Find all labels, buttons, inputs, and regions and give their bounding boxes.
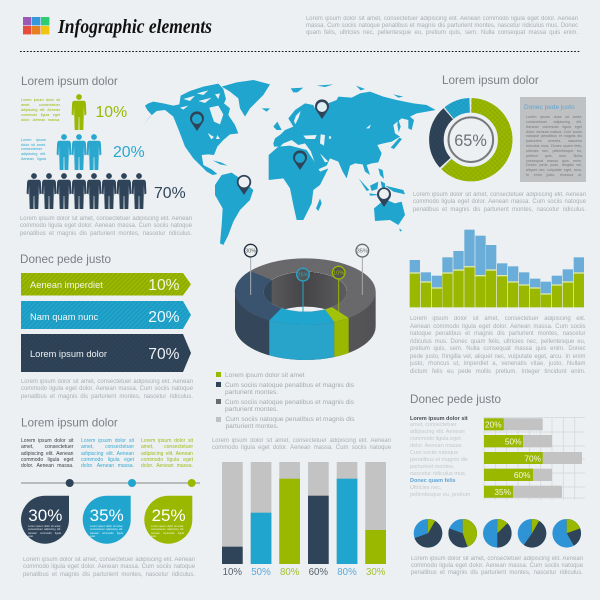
header [23,16,578,38]
text block: timeline caption: penatibus et magnis dis parturient montes, nascetur ridiculus. [23,572,195,578]
callout box: ultricies nec, pellentesque eu, [526,149,582,153]
text block: column chart caption: pede justo, fringilla vel, aliquet nec, vulputate eget, arcu. In enim [410,354,586,360]
heading: Lorem ipsum dolor [21,75,118,88]
text block: list: Lorem ipsum dolor sit [410,416,468,422]
stacked columns [410,230,584,307]
text block: column chart caption [410,316,586,378]
text block: green note: Lorem ipsum dolor sit [21,98,60,102]
text block: blue note [21,138,46,163]
bar: 20%: 20% [485,420,502,430]
bar: 50%: 50% [251,567,271,578]
text block: blue note: Lorem ipsum [21,138,46,142]
drop: 25%: consectetuer adipiscing elit. [151,528,184,531]
bar: 70%: 70% [524,453,542,463]
drop: 30%: 30% [28,506,62,525]
text block: list: nascetur ridiculus mus. [410,471,466,477]
bar: 50%: 50% [505,436,522,446]
text block: list: amet, consectetuer [410,422,457,428]
callout box: pretium quis, sem. Nulla [526,154,582,158]
grid lines [484,417,585,500]
pin: Russia [315,99,329,119]
callout box: Donec pede justo, fringilla vel, [526,163,582,167]
bar: 60%: 60% [309,567,328,578]
text block: arrows caption: penatibus et magnis dis parturient montes, nascetur ridiculus. [21,394,193,400]
text block: people caption: commodo ligula eget dolor. Aenean massa. Cum sociis natoque [20,223,192,229]
pin: 30%: 30% [245,249,256,255]
text block: column chart caption: dictum felis eu pede mollis pretium. Integer tincidunt enim. [410,368,586,374]
bar: 80% [279,462,300,578]
text block: timeline caption [23,557,195,580]
pie 1 [421,526,435,540]
text block: green note: dolor. Aenean massa. [21,118,60,122]
bar: 10% [222,462,243,578]
text block: list: parturient montes, [410,464,454,470]
pin: 10%: 10% [333,271,344,277]
text block: column 1 [21,438,74,471]
panel: vertical progress bars [212,438,391,578]
text block: column 2: dolor. Aenean massa. [81,463,134,469]
icon: green person [72,94,86,130]
text block: list: penatibus et magnis dis [410,457,468,463]
pin: Australia [377,187,391,207]
arrow: blue: Nam quam nunc [30,312,99,322]
pie charts [421,526,574,540]
text block: people caption: penatibus et magnis dis parturient montes, nascetur ridiculus. [20,230,192,236]
text block: column 1: dolor. Aenean massa. [21,463,74,469]
text block: blue note: Aenean ligula [21,157,46,161]
bar: 10%: 10% [223,567,242,578]
bar: 80%: 80% [280,567,300,578]
text block: column chart caption: Lorem ipsum dolor sit amet, consectetuer adipiscing elit. [410,316,586,322]
drop: 35%: 35% [90,506,124,525]
arrow: blue [21,301,191,329]
text block: column 2: amet, consectetuer [81,444,134,450]
heading: Donec pede justo [410,393,501,406]
arrow: green: Aenean imperdiet [30,280,103,290]
icons: navy people [27,173,146,209]
arrow: blue: 20% [148,309,180,326]
bar: 70% [484,452,582,464]
text block: list: pellentesque eu, pretium [410,492,470,498]
pin: North America [190,111,204,131]
pie 3 [490,526,504,540]
text block: arrows caption: commodo ligula eget dolor. Aenean massa. Cum sociis natoque [21,386,193,392]
arrow: green [21,273,191,296]
text block: column chart caption: Aenean commodo ligula eget dolor. Aenean massa. Cum sociis [410,324,586,330]
callout box: dolor. Aenean massa. Cum sociis [526,130,582,134]
panel: 3D ring chart [216,244,376,430]
bar: 50% [251,462,271,578]
text block: column 3: commodo ligula eget [141,457,193,463]
pin: 25% [297,268,309,319]
text block: green note: amet, consectetuer [21,103,60,107]
text block: list [410,416,476,502]
bar: 30%: 30% [366,567,386,578]
drop: 25%: 25% [152,506,186,525]
text block: blue note: consectetuer [21,147,42,151]
text block: column 3: dolor. Aenean massa. [141,463,193,469]
legend [216,372,355,430]
text block: pies caption: Lorem ipsum dolor sit amet, consectetuer adipiscing elit. Aenean [411,556,583,562]
text block: arrows caption [21,379,193,402]
icon: colour squares logo [23,17,49,34]
panel: horizontal bars and pies [410,393,585,578]
arrow: green: 10% [148,277,180,294]
title: Infographic elements [57,16,212,38]
text block: column chart caption: justo, rhoncus ut, imperdiet a, venenatis vitae, justo. Nullam [410,361,586,367]
heading: Donec pede justo [20,253,111,266]
pin: 25%: 25% [297,273,309,279]
text block: pies caption: commodo ligula eget dolor. Aenean massa. Cum sociis natoque [411,563,583,569]
drop: 35% [83,496,131,544]
text block: green note: commodo ligula eget [21,113,60,117]
text block: column 3: adipiscing elit. Aenean [141,451,193,457]
pin: South America [237,175,251,195]
text block: column 1: adipiscing elit. Aenean [21,451,74,457]
donut chart [437,106,505,174]
bar: 35%: 35% [494,487,512,497]
text block: column chart caption: natoque penatibus et magnis dis parturient montes, nascetur [410,331,586,337]
text block: column 1: amet, consectetuer [21,444,74,450]
text block: blue note: adipiscing elit. [21,152,46,156]
label: 10%: 10% [96,104,127,121]
callout box: parturient montes, nascetur [526,139,582,143]
callout box: consequat massa quis enim. [526,159,582,163]
pin: 10% [332,266,345,312]
text block: people caption [20,216,192,239]
donut value: 65% [454,132,487,150]
panel: arrow banners [20,253,193,402]
text block: column 3: amet, consectetuer [141,444,193,450]
pin: 35%: 35% [357,249,368,255]
text block: column chart caption: ridiculus mus. Donec quam felis, ultricies nec, pellentesque eu, [410,338,586,344]
callout box: Lorem ipsum dolor sit amet, [526,115,582,119]
text block: column 2: commodo ligula eget [81,457,134,463]
map: Eurasia, Africa, Australia [269,84,436,232]
text block: arrows caption: Lorem ipsum dolor sit amet, consectetuer adipiscing elit. Aenean [21,379,193,385]
callout box [520,97,586,182]
bar: 30% [365,462,386,578]
icons: blue people [57,134,101,170]
label: 20%: 20% [113,144,145,161]
pie 4 [525,526,539,540]
drop: 30%: consectetuer adipiscing elit. [28,528,61,531]
text block: donut caption [413,192,586,215]
arrow: navy: 70% [148,346,180,363]
callout box: ridiculus mus. Donec quam felis, [526,144,582,148]
text block: list: Cum sociis natoque [410,450,458,456]
callout box: consectetuer adipiscing elit. [526,120,582,124]
drop: 25%: Lorem ipsum dolor sit amet, [151,524,184,528]
text block: header intro: quam felis, ultricies nec, pellentesque eu, pretium quis, sem. Nulla consequat massa quis enim. [306,30,578,36]
text block: list: Ultricies nec, [410,485,441,491]
bar: 50% [484,435,552,447]
text block: column chart caption: pretium quis, sem. Nulla consequat massa quis enim. Donec [410,346,586,352]
legend: parturient montes. [225,406,278,413]
map: Americas [143,80,270,245]
text block: green note [21,98,60,123]
legend: Cum sociis natoque penatibus et magnis dis [225,399,355,406]
legend: Cum sociis natoque penatibus et magnis dis [226,416,355,423]
panel: people percentages [20,75,192,239]
timeline [21,479,200,487]
text block: bars intro [212,438,391,454]
drop: 30%: Lorem ipsum dolor sit amet, [28,524,61,528]
text block: column 2 [81,438,134,471]
text block: header intro [306,16,578,38]
callout box: Donec pede justo [524,104,575,111]
arrow: navy [21,334,191,372]
bar: 35% [484,486,562,498]
drop: 25% [144,496,192,544]
pin: 35% [356,244,369,295]
panel: timeline and drops [21,417,200,580]
bar: 80%: 80% [337,567,357,578]
text block: list: adipiscing elit. Aenean [410,429,465,435]
bar: 60% [484,469,552,481]
text block: list: dolor. Aenean massa. [410,443,463,449]
legend: parturient montes. [225,389,278,396]
text block: timeline caption: Lorem ipsum dolor sit amet, consectetuer adipiscing elit. Aenean [23,557,195,563]
pie 2 [456,526,470,540]
panel: donut chart [413,74,586,215]
text block: list: Donec quam felis [410,478,456,484]
text block: header intro: Lorem ipsum dolor sit amet, consectetuer adipiscing elit. Aenean commodo ligula eget dolor. Aenean [306,16,578,22]
text block: green note: adipiscing elit. Aenean [21,108,60,112]
donut centre ring [448,117,493,162]
text block: column 3 [141,438,193,471]
label: 70%: 70% [154,185,186,202]
heading: Lorem ipsum dolor [442,74,539,87]
text block: column 1: commodo ligula eget [21,457,74,463]
pin: Africa [293,150,307,170]
panel: stacked column chart [410,230,586,378]
heading: Lorem ipsum dolor [21,417,118,430]
text block: people caption: Lorem ipsum dolor sit amet, consectetuer adipiscing elit. Aenean [20,216,192,222]
callout box: Aenean commodo ligula eget [526,125,582,129]
text block: donut caption: Lorem ipsum dolor sit amet, consectetuer adipiscing elit. Aenean [413,192,586,198]
text block: column 3: Lorem ipsum dolor sit [141,438,193,444]
drop: 35%: Lorem ipsum dolor sit amet, [90,524,123,528]
text block: column 2: adipiscing elit. Aenean [81,451,134,457]
text block: blue note: dolor sit amet, [21,143,46,147]
bar: 60%: 60% [514,470,531,480]
legend: parturient montes. [226,423,279,430]
arrow: navy: Lorem ipsum dolor [30,349,107,359]
text block: timeline caption: commodo ligula eget dolor. Aenean massa. Cum sociis natoque [23,564,195,570]
drop: 30% [21,496,69,544]
text block: list: commodo ligula eget [410,436,461,442]
text block: header intro: massa. Cum sociis natoque penatibus et magnis dis parturient montes, nascetur ridiculus mus. Donec [306,23,578,29]
text block: bars intro: commodo ligula eget dolor. Aenean massa. Cum sociis natoque [212,445,391,451]
text block: bars intro: Lorem ipsum dolor sit amet, consectetuer adipiscing elit. Aenean [212,438,391,444]
callout box: natoque penatibus et magnis dis [526,134,582,138]
drop: 35%: consectetuer adipiscing elit. [90,528,123,531]
text block: column 1: Lorem ipsum dolor sit [21,438,74,444]
bar: 80% [337,462,357,578]
pin: 30% [244,244,257,295]
text block: donut caption: penatibus et magnis dis parturient montes, nascetur ridiculus. [413,206,586,212]
3D ring [235,244,376,360]
callout box: aliquet nec, vulputate eget, arcu. [526,168,582,172]
text block: donut caption: commodo ligula eget dolor. Aenean massa. Cum sociis natoque [413,199,586,205]
world map [143,80,436,245]
legend: Lorem ipsum dolor sit amet [225,372,305,379]
text block: pies caption [411,556,583,578]
callout box: In enim justo, rhoncus ut, [526,173,582,177]
pie 5 [560,526,574,540]
legend: Cum sociis natoque penatibus et magnis dis [225,382,355,389]
bar: 20% [484,418,543,430]
bar: 60% [308,462,329,578]
text block: pies caption: penatibus et magnis dis parturient montes, nascetur ridiculus. [411,570,583,576]
text block: column 2: Lorem ipsum dolor sit [81,438,134,444]
